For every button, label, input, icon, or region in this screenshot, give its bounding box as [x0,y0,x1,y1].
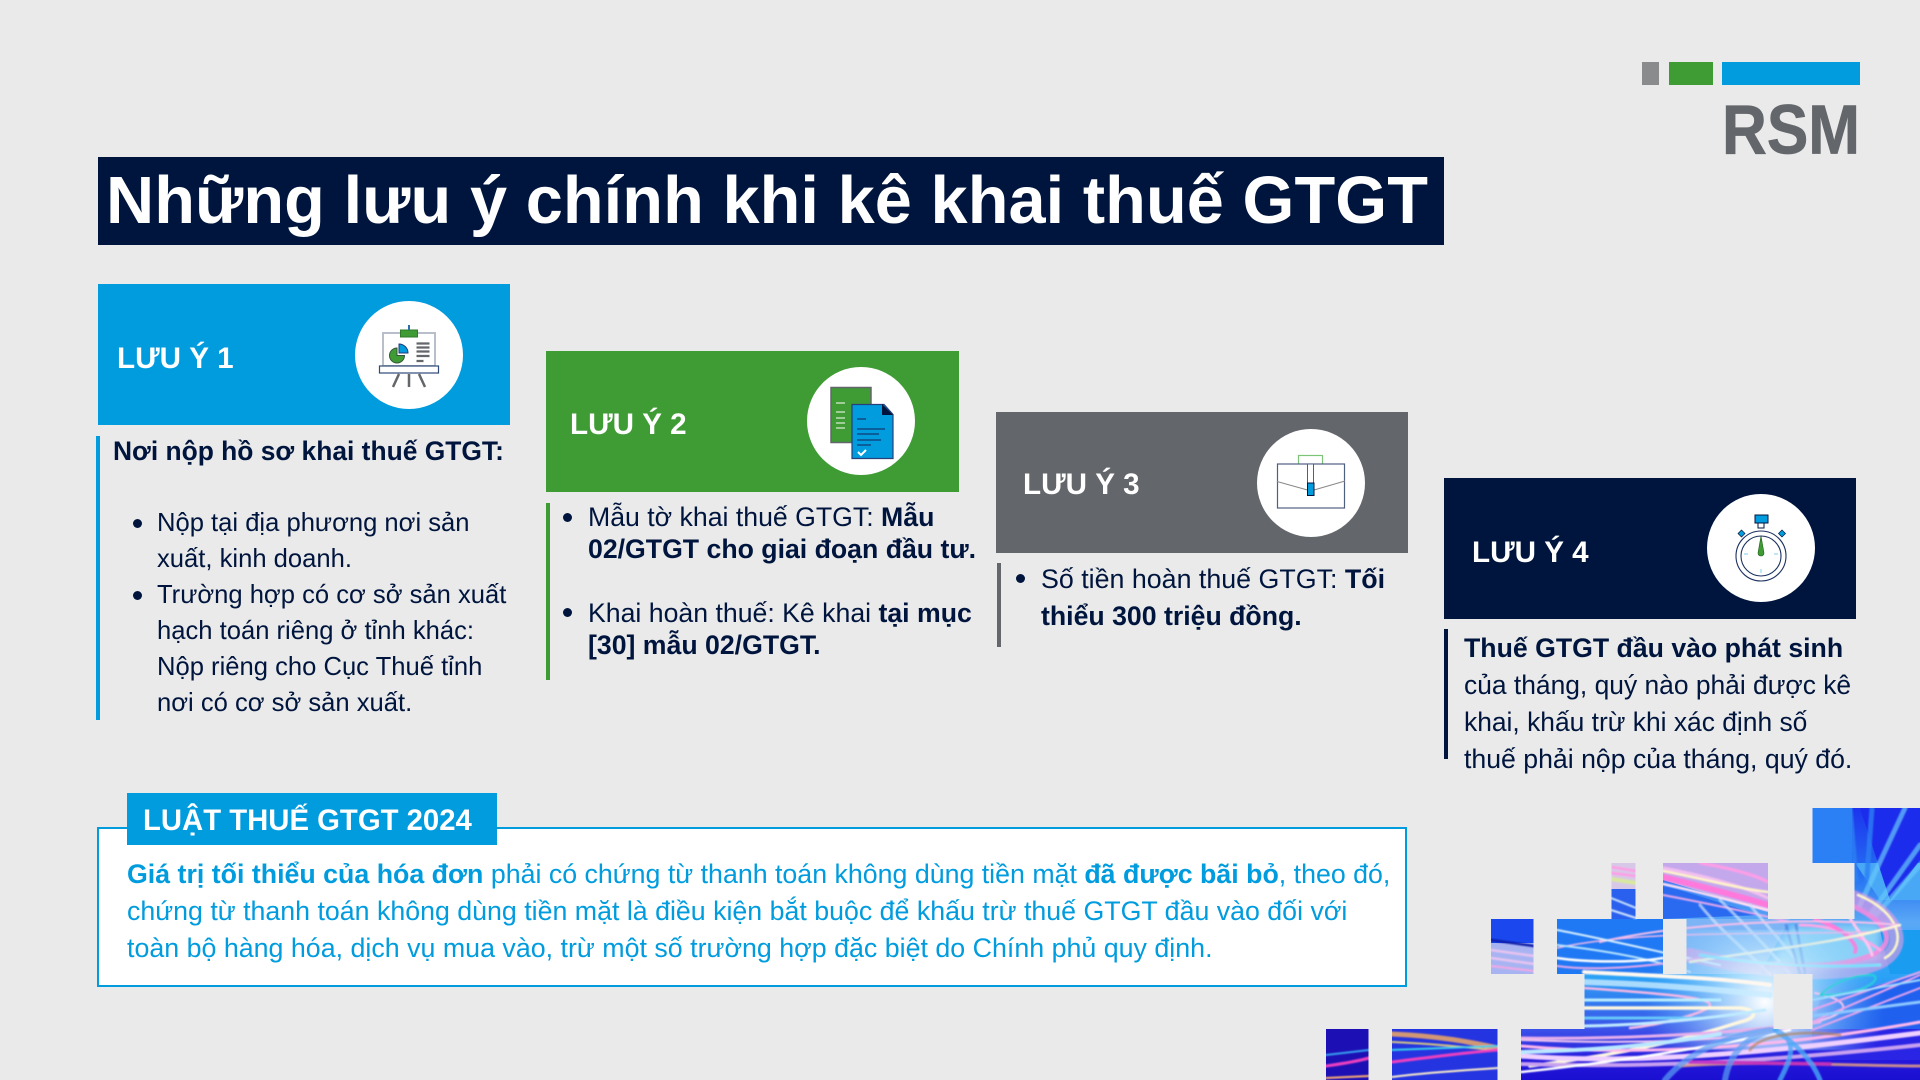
note 3 bullet list: thiểu 300 triệu đồng. [1041,601,1302,631]
note 1 heading: Nơi nộp hồ sơ khai thuế GTGT: [113,436,504,466]
note 2 bullet list: Mẫu tờ khai thuế GTGT: Mẫu [588,502,934,532]
logo: RSM [1642,62,1860,156]
law body text [127,859,1390,963]
law body text: chứng từ thanh toán không dùng tiền mặt là điều kiện bắt buộc để khấu trừ thuế GTGT đầu vào đối với [127,896,1347,926]
note 1 bullet list: Nộp tại địa phương nơi sản [157,509,470,537]
note 1 bullet list: xuất, kinh doanh. [157,545,352,573]
law body text: Giá trị tối thiểu của hóa đơn phải có chứng từ thanh toán không dùng tiền mặt đã được bãi bỏ, theo đó, [127,859,1390,889]
note 1 accent bar [96,436,100,720]
note 3 bullet list [1016,564,1385,631]
icon: presentation board [355,301,463,409]
note 2 accent bar [546,503,550,680]
note 3 header [996,412,1408,553]
note 1 bullet list: Nộp riêng cho Cục Thuế tỉnh [157,653,482,681]
icon: documents [807,367,915,475]
note 4 accent bar [1444,629,1448,759]
note 4 body text: thuế phải nộp của tháng, quý đó. [1464,744,1852,774]
note 4 header [1444,478,1856,619]
panel: note 2 [546,351,976,680]
note 4 body text: của tháng, quý nào phải được kê [1464,670,1851,700]
law box [97,827,1407,987]
note 1 bullet list: hạch toán riêng ở tỉnh khác: [157,617,474,645]
note 1 bullet list [133,509,506,717]
note 4 body text: Thuế GTGT đầu vào phát sinh [1464,633,1843,663]
law tab heading [127,793,497,845]
note 1 header [98,284,510,425]
note 2 bullet list: Khai hoàn thuế: Kê khai tại mục [588,598,972,628]
law tab heading: LUẬT THUẾ GTGT 2024 [143,804,472,837]
note 2 header [546,351,959,492]
panel: note 1 [96,284,510,720]
note 2 bullet list: 02/GTGT cho giai đoạn đầu tư. [588,534,976,564]
note 4 body text: khai, khấu trừ khi xác định số [1464,707,1807,737]
panel: note 3 [996,412,1408,647]
note 1 bullet list: nơi có cơ sở sản xuất. [157,689,412,717]
note 4 body text [1464,633,1852,774]
panel: note 4 [1444,478,1856,774]
note 2 label: LƯU Ý 2 [570,408,687,441]
title: Những lưu ý chính khi kê khai thuế GTGT [106,164,1428,238]
decorative image: light streaks [1326,808,1920,1080]
icon: briefcase [1257,429,1365,537]
note 1 bullet list: Trường hợp có cơ sở sản xuất [157,581,506,609]
note 3 label: LƯU Ý 3 [1023,468,1140,501]
note 2 bullet list: [30] mẫu 02/GTGT. [588,630,821,660]
note 3 accent bar [997,563,1001,647]
law body text: toàn bộ hàng hóa, dịch vụ mua vào, trừ một số trường hợp đặc biệt do Chính phủ quy định. [127,933,1213,963]
note 3 bullet list: Số tiền hoàn thuế GTGT: Tối [1041,564,1385,594]
panel: VAT law 2024 [97,793,1407,987]
note 2 bullet list [563,502,976,660]
note 1 label: LƯU Ý 1 [117,342,234,375]
note 4 label: LƯU Ý 4 [1472,536,1589,569]
icon: stopwatch [1707,494,1815,602]
